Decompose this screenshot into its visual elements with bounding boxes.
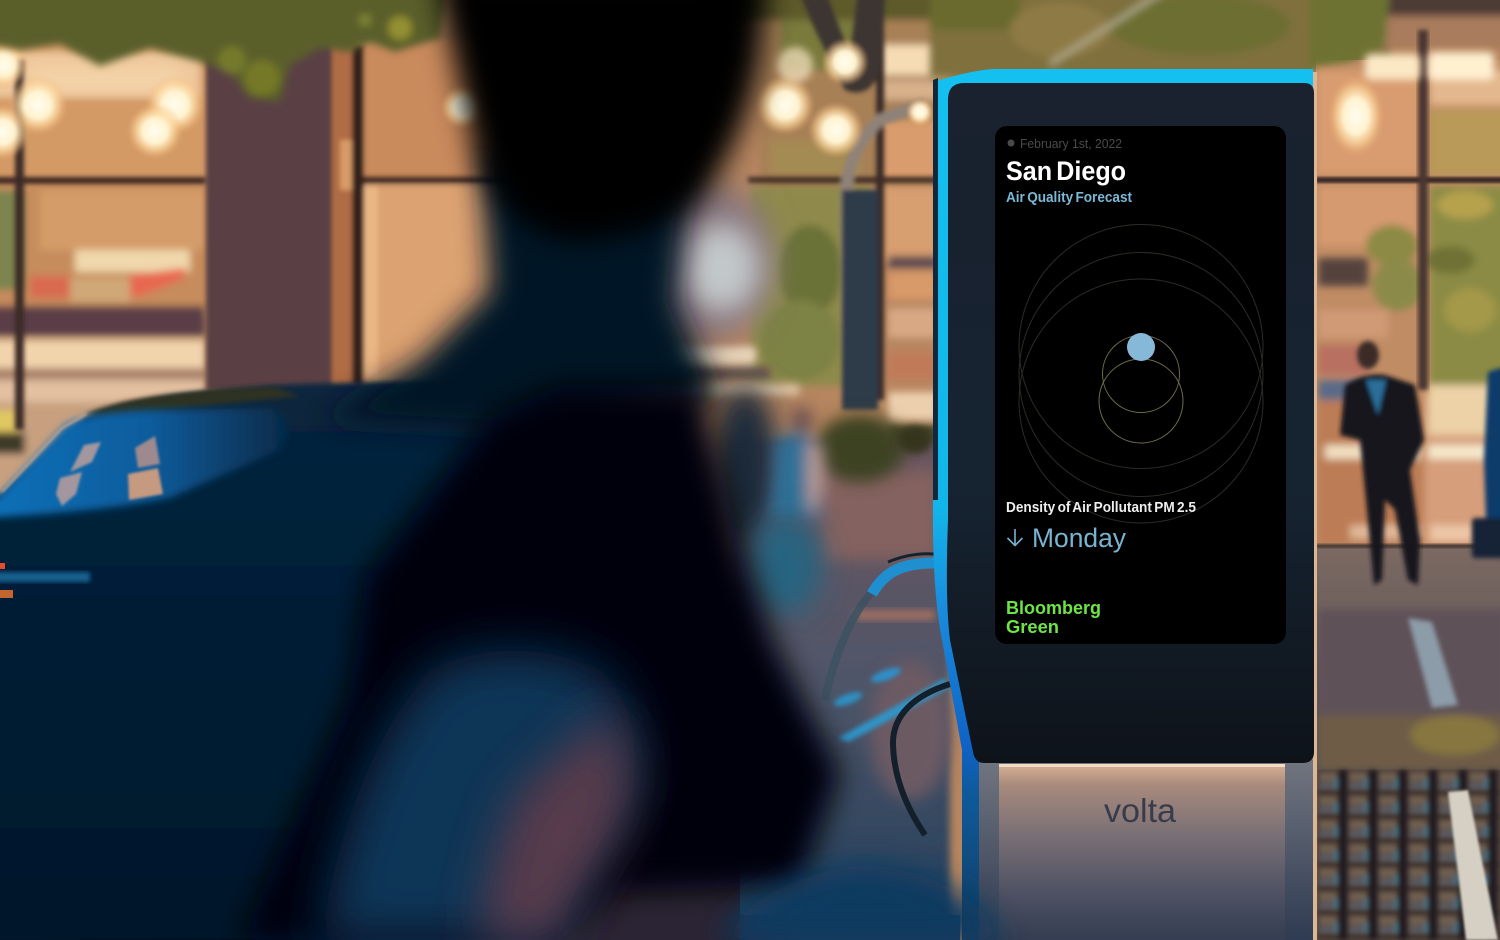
status dot bbox=[1008, 140, 1014, 146]
pollutant marker dot bbox=[1127, 333, 1155, 361]
tree trunk and window frame bbox=[748, 0, 938, 410]
person: sleeve bbox=[320, 650, 636, 940]
screen bbox=[995, 126, 1286, 644]
blurred pedestrian, centre bbox=[770, 406, 824, 520]
blurred pedestrian in dark suit, right bbox=[1340, 341, 1424, 585]
cobblestones and road markings, right bbox=[1318, 610, 1500, 940]
brand: Bloomberg Green: Bloomberg bbox=[1006, 598, 1101, 618]
foliage: top right tree above charger bbox=[930, 0, 1390, 78]
brand: Bloomberg Green: Green bbox=[1006, 617, 1059, 637]
housing bbox=[947, 83, 1314, 763]
blurred window reflections bbox=[668, 346, 800, 396]
person: head bbox=[435, 0, 770, 240]
blurred pedestrian with bag, far right bbox=[1472, 365, 1500, 558]
icon: down arrow bbox=[1008, 529, 1022, 546]
day label: Monday bbox=[1032, 523, 1126, 553]
background: building and windows, right bbox=[1310, 0, 1500, 940]
person: lower right blur bbox=[720, 865, 1005, 940]
planter and centre ground bbox=[711, 385, 950, 940]
brand logo: volta bbox=[1104, 792, 1177, 829]
reflections on wet ground bbox=[832, 665, 948, 742]
foreground person: blurred silhouette bbox=[240, 0, 1005, 940]
air pollutant density circles bbox=[1019, 224, 1263, 523]
charging cables bbox=[825, 554, 950, 835]
pedestal bbox=[975, 760, 1315, 940]
lights left bbox=[0, 41, 485, 160]
person: neck and collar bbox=[320, 150, 720, 430]
parked car bbox=[0, 378, 960, 940]
background: building and windows, centre bbox=[668, 0, 950, 454]
window glare behind person bbox=[635, 182, 775, 342]
subtitle: Air Quality Forecast bbox=[1006, 190, 1132, 206]
blue light edge bbox=[933, 69, 1316, 940]
person: back bbox=[240, 385, 840, 940]
brand: Bloomberg Green bbox=[1006, 598, 1101, 637]
date: February 1st, 2022 bbox=[1020, 137, 1122, 151]
foliage: top left tree bbox=[0, 0, 450, 102]
person: arm bbox=[480, 710, 630, 940]
charging station bbox=[933, 69, 1317, 940]
city title: San Diego bbox=[1006, 156, 1126, 186]
chart label: Density of Air Pollutant PM 2.5 bbox=[1006, 500, 1196, 516]
